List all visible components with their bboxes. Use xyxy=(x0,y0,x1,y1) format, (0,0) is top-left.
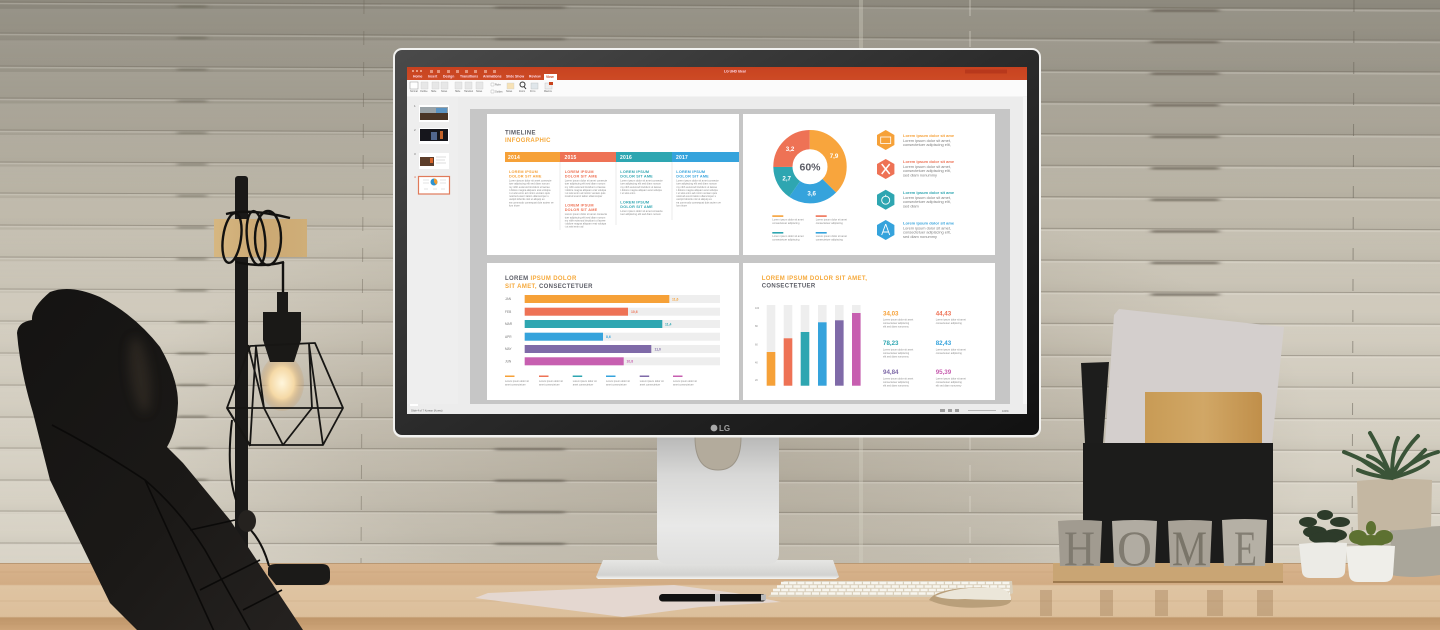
donut chart xyxy=(782,140,839,197)
y axis labels: 100 xyxy=(755,307,760,310)
chair seams xyxy=(52,425,282,630)
column 2015: DOLOR SIT AME xyxy=(565,208,598,212)
column 2016: tuer adipiscing elit sed diam nonum xyxy=(620,182,661,186)
document organizer xyxy=(1081,309,1284,565)
icon list text: Lorem ipsum dolor sit amet, xyxy=(903,164,951,169)
statistics: 78,23 xyxy=(883,340,899,347)
block H: H xyxy=(1064,520,1095,576)
column 2015: my nibh euismod tincidunt ut laoree xyxy=(565,218,606,222)
column 2015: tuer adipiscing elit sed diam nonum xyxy=(565,182,605,186)
column 2014: Lorem ipsum dolor sit amet consecte xyxy=(509,179,552,183)
bars xyxy=(525,295,669,365)
column 2016: DOLOR SIT AME xyxy=(620,205,653,209)
column 2015: my nibh euismod tincidunt ut laoree xyxy=(565,185,606,189)
icon list text: Lorem ipsum dolor sit amet, xyxy=(903,138,951,143)
white paper xyxy=(1105,309,1284,443)
statistics: 95,39 xyxy=(936,369,952,376)
donut legend: Lorem ipsum dolor sit amet xyxy=(772,218,804,222)
thumbnail 2 xyxy=(419,128,449,144)
lamp cord coils xyxy=(220,210,290,566)
column 2016 xyxy=(620,170,663,216)
column 2016: Lorem ipsum dolor sit amet consecte xyxy=(620,209,663,213)
bar legend: amet consectetuer xyxy=(673,384,694,386)
column 2015: t ut wisi enim ad xyxy=(565,225,584,229)
lamp switch xyxy=(238,510,256,532)
column 2015: t dolore magna aliquam erat volutpa xyxy=(565,222,607,226)
bar chart heading xyxy=(505,276,593,290)
tall ribbed pot xyxy=(1357,479,1432,531)
monitor stand xyxy=(596,437,839,579)
ribbon: Slide xyxy=(455,90,461,93)
timeline year bands: 2015 xyxy=(564,155,576,161)
white square pot left xyxy=(1299,542,1347,578)
bar legend: Lorem ipsum dolor sit xyxy=(539,380,563,383)
ribbon: Guides xyxy=(495,90,503,94)
ribbon: Slide xyxy=(431,90,437,93)
column 2015: DOLOR SIT AME xyxy=(565,174,598,178)
donut chart: 3,2 xyxy=(786,146,795,153)
mouse xyxy=(929,587,1011,608)
ribbon: Normal xyxy=(410,90,418,93)
slide thumbnail panel: 1 xyxy=(414,104,416,108)
month labels: JUN xyxy=(505,360,512,364)
bar values: 10,6 xyxy=(631,310,638,314)
timeline year bands xyxy=(505,152,739,162)
statistics: consectetuer adipiscing xyxy=(883,352,910,355)
icon: teal hexagon stopwatch xyxy=(877,190,894,210)
slide thumbnail panel: 2 xyxy=(414,128,416,132)
thumbnail 4 selected xyxy=(418,176,450,194)
timeline year bands: 2014 xyxy=(508,155,520,161)
bar legend: Lorem ipsum dolor sit xyxy=(505,380,529,383)
icon list text: consectetuer adipiscing elit, xyxy=(903,230,951,235)
y axis labels xyxy=(755,307,760,382)
statistics: Lorem ipsum dolor sit amet xyxy=(936,318,966,322)
column 2016: tuer adipiscing elit sed diam nonum xyxy=(620,212,661,216)
bar values: 11,4 xyxy=(665,322,672,326)
ribbon: Ruler xyxy=(495,84,501,86)
icon: red hexagon tools xyxy=(877,159,894,179)
bar legend: amet consectetuer xyxy=(539,384,560,386)
monitor frame xyxy=(393,48,1041,438)
column 2014: lum iriure xyxy=(509,203,520,207)
stand cable hole xyxy=(695,437,741,470)
title bar: View xyxy=(546,75,554,79)
bar values: 11,0 xyxy=(654,347,661,351)
y axis labels: 80 xyxy=(755,325,758,328)
column 2014: t dolore magna aliquam erat volutpa xyxy=(509,188,551,192)
icon: orange hexagon xyxy=(877,130,894,150)
small green succulent xyxy=(1349,521,1393,547)
light bulb xyxy=(260,355,304,411)
column 2014: t ut wisi enim ad minim veniam quis xyxy=(509,191,550,195)
title bar: Transitions xyxy=(460,74,478,78)
LG logo xyxy=(711,424,730,433)
month labels: APR xyxy=(505,335,512,339)
title bar: Animations xyxy=(483,74,502,78)
month labels: MAY xyxy=(505,347,513,351)
statistics: Lorem ipsum dolor sit amet xyxy=(883,348,913,352)
white square pot right xyxy=(1346,545,1395,582)
statistics: consectetuer adipiscing xyxy=(936,352,962,355)
icon list text: sed diam xyxy=(903,204,919,209)
statistics: consectetuer adipiscing xyxy=(936,381,962,384)
bar chart heading: LOREM IPSUM DOLOR xyxy=(505,276,577,282)
potted plants xyxy=(1299,433,1440,582)
donut legend: consectetuer adipiscing xyxy=(772,238,800,242)
y axis labels: 60 xyxy=(755,344,758,346)
bar legend: amet consectetuer xyxy=(606,384,627,386)
column 2016: t dolore magna aliquam erat volutpa xyxy=(620,188,662,192)
column 2017: uscipit lobortis nisl ut aliquip ex xyxy=(676,197,713,201)
column 2015: LOREM IPSUM xyxy=(565,204,594,208)
bar legend: amet consectetuer xyxy=(640,384,660,386)
column 2016: my nibh euismod tincidunt ut laoree xyxy=(620,185,662,189)
icon list text xyxy=(903,133,955,239)
bar tracks xyxy=(525,295,720,365)
lamp base xyxy=(268,564,330,585)
stand base xyxy=(596,560,839,579)
bar legend: Lorem ipsum dolor sit xyxy=(606,380,630,383)
statistics: Lorem ipsum dolor sit amet xyxy=(883,378,913,380)
timeline year bands: 2017 xyxy=(676,155,688,161)
y axis labels: 40 xyxy=(755,362,758,364)
donut chart: 2,7 xyxy=(782,175,792,182)
bar legend: amet consectetuer xyxy=(573,384,593,386)
statistics: elit sed diam nonummy xyxy=(936,384,962,388)
thumbnail 3 xyxy=(419,153,449,169)
lamp socket xyxy=(263,292,301,362)
bar values: 8,6 xyxy=(606,335,611,339)
column 2017: Lorem ipsum dolor sit amet consecte xyxy=(676,179,719,183)
column 2014: LOREM IPSUM xyxy=(509,170,538,174)
statistics: consectetuer adipiscing xyxy=(883,322,910,325)
slide: horizontal bar chart xyxy=(487,263,739,400)
icon list text: Lorem ipsum dolor sit ame xyxy=(903,220,955,226)
column 2017: my nibh euismod tincidunt ut laoree xyxy=(676,185,718,189)
statistics: 82,43 xyxy=(936,340,952,347)
column 2015: t ut wisi enim ad minim veniam quis xyxy=(565,191,606,195)
icon list text: Lorem ipsum dolor sit ame xyxy=(903,159,955,164)
column 2014: tuer adipiscing elit sed diam nonum xyxy=(509,182,550,186)
timeline year bands: 2016 xyxy=(620,155,632,161)
lamp pole xyxy=(235,176,248,566)
ribbon: Zoom xyxy=(519,90,525,93)
dark folder xyxy=(1081,362,1109,443)
ribbon: Handout xyxy=(464,90,473,93)
screen: presentation app xyxy=(407,67,1027,414)
black box xyxy=(1083,443,1273,565)
column 2015: Lorem ipsum dolor sit amet consecte xyxy=(565,212,608,216)
ribbon: Fit to xyxy=(530,90,536,93)
column 2015: t dolore magna aliquam erat volutpa xyxy=(565,188,607,192)
bar values: 10,8 xyxy=(626,360,633,364)
column 2016: Lorem ipsum dolor sit amet consecte xyxy=(620,179,663,183)
timeline heading: INFOGRAPHIC xyxy=(505,138,551,144)
statistics: elit sed diam nonummy xyxy=(883,384,909,388)
icon list text: sed diam nonummy xyxy=(903,173,937,178)
column 2017: t ut wisi enim ad minim veniam quis xyxy=(676,191,718,195)
statistics: Lorem ipsum dolor sit amet xyxy=(936,348,966,352)
month labels xyxy=(505,297,513,364)
donut chart: 3,6 xyxy=(807,190,817,197)
statistics: 94,84 xyxy=(883,369,899,376)
statistics: 34,03 xyxy=(883,310,899,318)
donut legend: Lorem ipsum dolor sit amet xyxy=(772,234,804,238)
donut legend: Lorem ipsum dolor sit amet xyxy=(816,234,847,238)
icon list text: Lorem ipsum dolor sit ame xyxy=(903,133,955,138)
icon list text: consectetuer adipiscing elit, xyxy=(903,142,951,147)
slide thumbnail panel: 4 xyxy=(414,175,416,179)
statistics xyxy=(883,310,966,388)
column 2017: lum iriure xyxy=(676,203,688,207)
column chart heading: CONSECTETUER xyxy=(762,284,816,290)
block E: E xyxy=(1234,520,1257,576)
column 2016: t ut wisi enim xyxy=(620,191,635,195)
column 2017: t dolore magna aliquam erat volutpa xyxy=(676,188,718,192)
icon list text: consectetuer adipiscing elit, xyxy=(903,199,951,204)
bar legend: Lorem ipsum dolor sit xyxy=(640,380,664,383)
ribbon: Outline xyxy=(420,90,428,93)
bar legend: Lorem ipsum dolor sit xyxy=(573,380,597,383)
month labels: MAR xyxy=(505,322,513,326)
donut chart: 60% xyxy=(799,162,821,174)
column 2017: DOLOR SIT AME xyxy=(676,174,709,178)
column 2015 xyxy=(565,170,608,229)
statistics: consectetuer adipiscing xyxy=(936,322,962,325)
donut legend xyxy=(772,215,847,242)
title bar: Design xyxy=(443,74,454,78)
small dark succulent xyxy=(1299,510,1350,544)
bar values xyxy=(606,297,679,364)
statistics: elit sed diam nonummy xyxy=(883,356,909,358)
column 2014 xyxy=(509,170,554,207)
status bar xyxy=(407,404,1027,414)
pen xyxy=(659,594,766,602)
wooden tray xyxy=(1053,563,1283,583)
title bar: Slide Show xyxy=(506,74,524,78)
timeline heading: TIMELINE xyxy=(505,130,536,136)
thumbnail 1 xyxy=(419,105,449,122)
wire cage xyxy=(227,343,343,446)
office chair xyxy=(17,289,303,630)
statistics: elit sed diam nonummy xyxy=(883,326,909,328)
statistics: 44,43 xyxy=(936,310,952,318)
lamp wood block xyxy=(214,219,307,257)
y axis labels: 20 xyxy=(755,379,758,382)
timeline heading xyxy=(505,130,551,144)
icon list text: consectetuer adipiscing elit, xyxy=(903,168,951,173)
block O: O xyxy=(1117,520,1152,576)
LG logo: LG xyxy=(719,424,730,433)
title bar: LG UHD Ideal xyxy=(724,70,746,74)
bar legend xyxy=(505,376,697,386)
HOME letter blocks on tray xyxy=(1053,519,1283,583)
block E xyxy=(1222,519,1267,576)
ribbon xyxy=(407,80,1027,96)
column 2014: ea commodo consequat duis autem ve xyxy=(509,200,554,204)
column 2015: tuer adipiscing elit sed diam nonum xyxy=(565,215,605,219)
ribbon: Notes xyxy=(441,90,448,93)
column 2014: nostrud exerci tation ullamcorper s xyxy=(509,194,549,198)
column 2017: tuer adipiscing elit sed diam nonum xyxy=(676,182,717,186)
table lamp xyxy=(214,176,343,585)
status bar: Slide 4 of 7 Korean (Korea) xyxy=(411,408,443,412)
column 2017: ea commodo consequat duis autem ve xyxy=(676,200,721,204)
statistics: Lorem ipsum dolor sit amet xyxy=(883,318,913,322)
donut legend: consectetuer adipiscing xyxy=(816,221,843,225)
column 2017: LOREM IPSUM xyxy=(676,170,705,174)
column 2014: DOLOR SIT AME xyxy=(509,174,542,178)
slide: vertical bar chart xyxy=(743,263,995,400)
status bar: 100% xyxy=(1002,409,1009,413)
wooden notebook xyxy=(1145,392,1262,443)
title bar: Review xyxy=(529,74,541,78)
donut legend: Lorem ipsum dolor sit amet xyxy=(816,218,847,222)
bar legend: amet consectetuer xyxy=(505,384,526,386)
ribbon: Macros xyxy=(544,90,553,93)
column 2015: LOREM IPSUM xyxy=(565,170,594,174)
gray bowl xyxy=(1390,526,1440,577)
block M: M xyxy=(1172,520,1207,576)
column chart heading: LOREM IPSUM DOLOR SIT AMET, xyxy=(762,276,867,282)
statistics: consectetuer adipiscing xyxy=(883,381,910,384)
column 2017: nostrud exerci tation ullamcorper s xyxy=(676,194,717,198)
slide: donut chart xyxy=(743,114,995,255)
column 2015: Lorem ipsum dolor sit amet consecte xyxy=(565,179,608,183)
column 2016: LOREM IPSUM xyxy=(620,170,649,174)
column 2014: my nibh euismod tincidunt ut laoree xyxy=(509,185,550,189)
column 2015: nostrud exerci tation ullamcorper xyxy=(565,194,602,198)
column 2016: DOLOR SIT AME xyxy=(620,174,653,178)
chair silhouette xyxy=(17,289,303,630)
column 2017 xyxy=(676,170,721,207)
icon list text: sed diam nonummy xyxy=(903,234,937,239)
title bar xyxy=(407,67,1027,80)
aloe plant xyxy=(1344,433,1438,478)
slide thumbnail panel xyxy=(407,97,458,404)
month labels: JAN xyxy=(505,297,512,301)
column tracks xyxy=(767,305,861,386)
stand neck xyxy=(657,437,779,564)
statistics: Lorem ipsum dolor sit amet xyxy=(936,378,966,380)
wooden desk xyxy=(0,563,1440,630)
keyboard xyxy=(768,581,1013,597)
column chart heading xyxy=(762,276,867,290)
bar legend: Lorem ipsum dolor sit xyxy=(673,380,697,383)
columns xyxy=(767,313,861,386)
donut legend: consectetuer adipiscing xyxy=(772,221,800,225)
title bar: Home xyxy=(413,74,423,78)
title bar: Insert xyxy=(428,74,438,78)
monitor xyxy=(393,48,1041,438)
column 2016: LOREM IPSUM xyxy=(620,200,649,204)
ribbon: Notes xyxy=(476,90,483,93)
donut legend: consectetuer adipiscing xyxy=(816,238,843,242)
icon list text: Lorem ipsum dolor sit ame xyxy=(903,190,955,195)
slide canvas xyxy=(458,97,1027,404)
icon list text: Lorem ipsum dolor sit amet, xyxy=(903,195,951,200)
bar values: 11,6 xyxy=(672,297,679,301)
icon: blue hexagon compass xyxy=(877,220,894,240)
bar chart heading: SIT AMET, CONSECTETUER xyxy=(505,284,593,290)
ribbon: Notes xyxy=(506,90,513,93)
paper sheets on desk xyxy=(475,585,781,617)
slide: timeline infographic xyxy=(487,114,739,255)
month labels: FEB xyxy=(505,310,511,314)
headrest highlight xyxy=(125,336,155,414)
column 2014: uscipit lobortis nisl ut aliquip ex xyxy=(509,197,545,201)
icon list text: Lorem ipsum dolor sit amet, xyxy=(903,225,951,230)
donut chart: 7,9 xyxy=(830,153,839,160)
slide thumbnail panel: 3 xyxy=(414,152,416,156)
